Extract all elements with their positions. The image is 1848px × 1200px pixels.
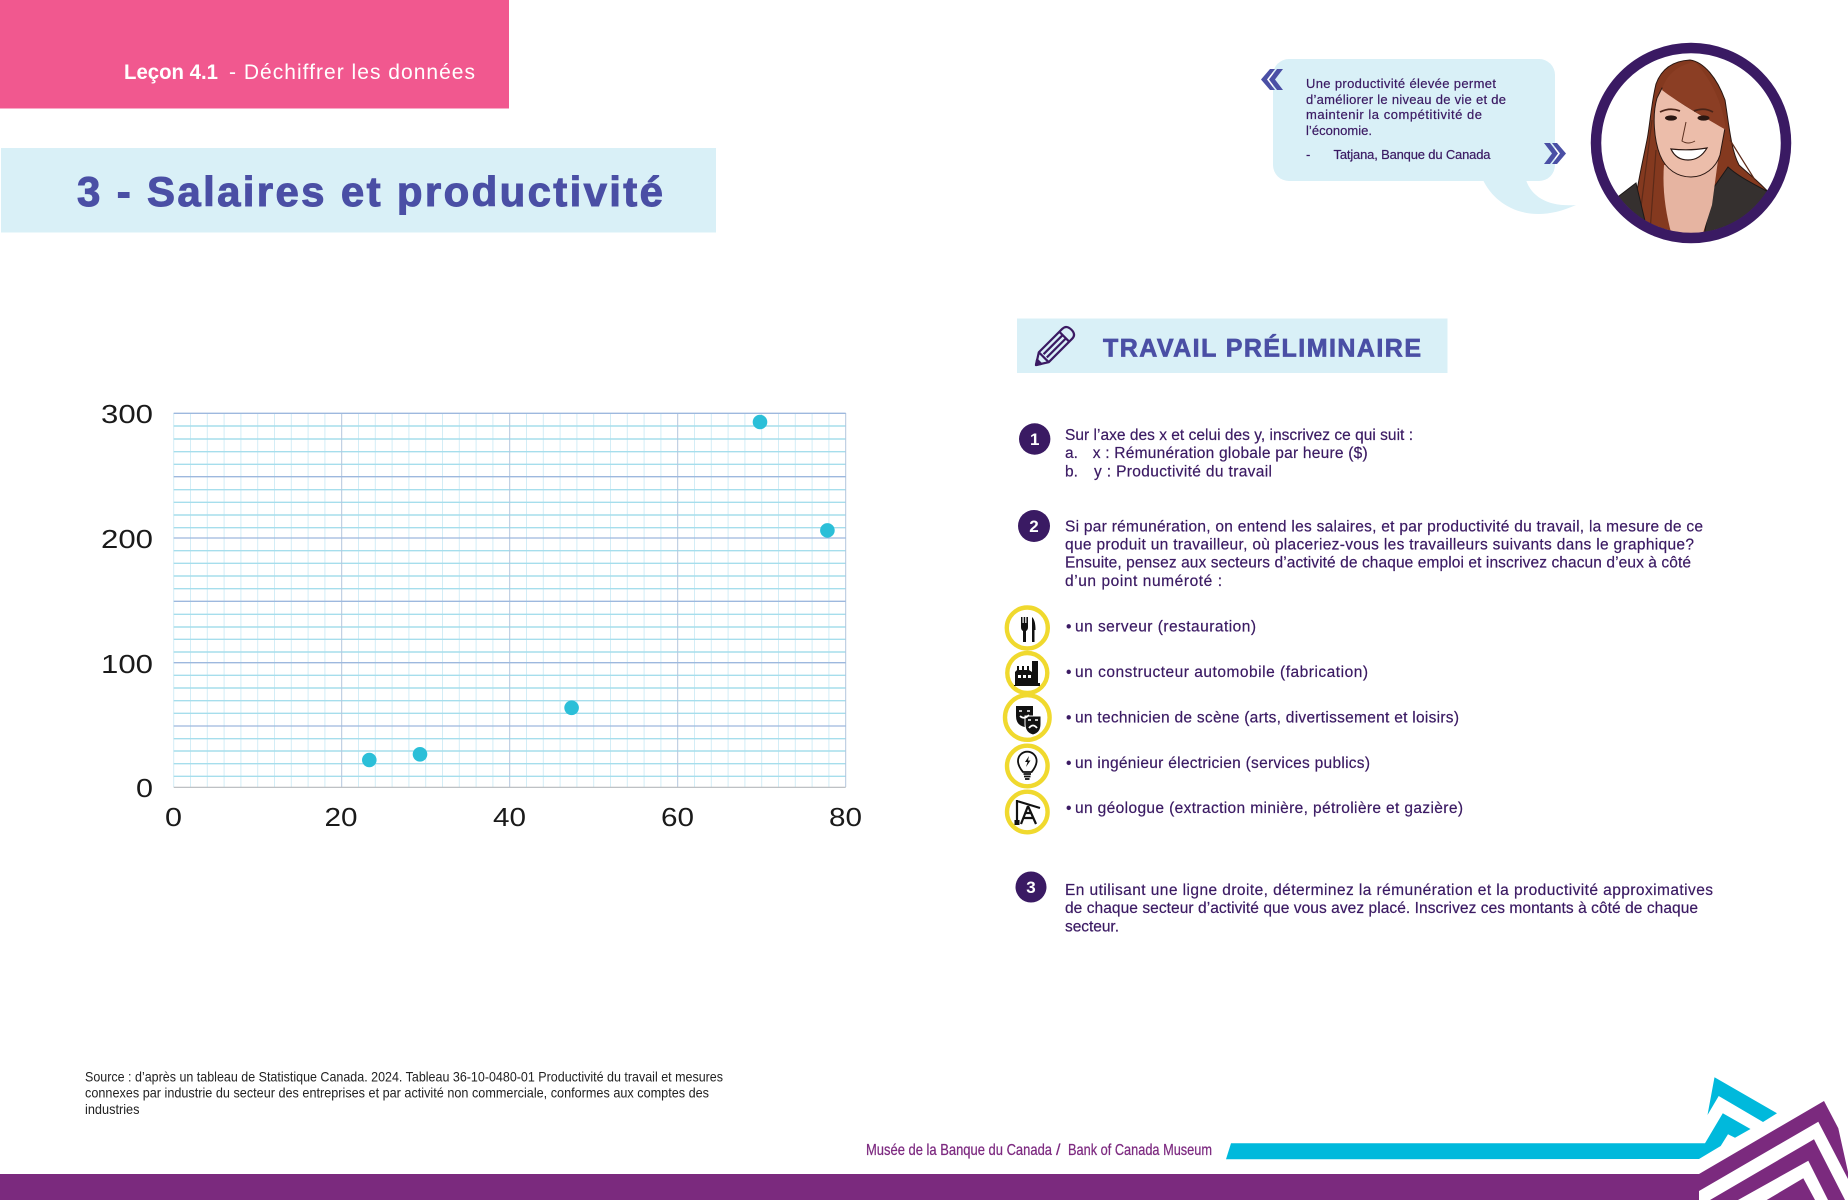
- step 2 text: [1065, 519, 1703, 590]
- step number 2: [1018, 510, 1050, 542]
- list: workers and sectors: [1005, 608, 1463, 832]
- data points: [362, 415, 835, 767]
- face: [1654, 88, 1725, 177]
- step 1 text: b.: [1065, 464, 1078, 480]
- list text: un ingénieur électricien (services publics): [1075, 755, 1370, 772]
- title panel: [1, 148, 716, 232]
- y axis labels: 0: [136, 773, 153, 803]
- step 1 text: Sur l’axe des x et celui des y, inscrivez ce qui suit :: [1065, 427, 1413, 444]
- list text: [1066, 619, 1463, 817]
- list text: un technicien de scène (arts, divertissement et loisirs): [1075, 710, 1459, 727]
- quote text: d’améliorer le niveau de vie et de: [1306, 92, 1506, 107]
- icon: closing quote mark: [1544, 143, 1566, 164]
- y axis labels: [101, 399, 153, 803]
- step 2 text: que produit un travailleur, où placeriez-vous les travailleurs suivants dans le graphique?: [1065, 536, 1694, 554]
- bubble body: [1273, 59, 1555, 181]
- logo chevron 2: [1710, 1139, 1845, 1200]
- jacket: [1618, 166, 1767, 232]
- cyan upper chevron: [1708, 1077, 1777, 1122]
- panel heading: travail préliminaire: [1017, 318, 1448, 373]
- y axis labels: 200: [101, 524, 153, 554]
- x axis labels: 0: [165, 802, 182, 832]
- eyebrows: [1660, 109, 1713, 112]
- icon: factory: [1007, 653, 1047, 693]
- step 2 text: Si par rémunération, on entend les salaires, et par productivité du travail, la mesure de ce: [1065, 519, 1703, 536]
- step 3 text: En utilisant une ligne droite, déterminez la rémunération et la productivité approximatives: [1065, 882, 1713, 899]
- lesson label: Leçon 4.1: [124, 61, 218, 84]
- list text: un serveur (restauration): [1075, 619, 1256, 636]
- step number 3: 3: [1026, 878, 1036, 897]
- portrait: Tatjana: [1596, 48, 1790, 242]
- list text: •: [1066, 800, 1071, 817]
- hair fringe: [1662, 62, 1726, 130]
- quote text: [1306, 76, 1506, 162]
- step 3 text: de chaque secteur d’activité que vous avez placé. Inscrivez ces montants à côté de chaque: [1065, 900, 1698, 917]
- list text: •: [1066, 664, 1071, 681]
- speech bubble quote: [1261, 59, 1576, 214]
- step 3 text: [1065, 882, 1713, 936]
- list text: •: [1066, 710, 1071, 727]
- step 2: [1018, 510, 1703, 590]
- x axis labels: [165, 802, 862, 832]
- graph paper grid: [174, 413, 846, 787]
- x axis labels: 80: [829, 802, 862, 832]
- step 1 text: [1065, 427, 1413, 480]
- cyan stripe arrow: [1226, 1113, 1750, 1159]
- museum name: Musée de la Banque du Canada: [866, 1142, 1052, 1159]
- step 1: [1019, 423, 1413, 480]
- footer band and logo: [0, 1077, 1848, 1200]
- list text: un constructeur automobile (fabrication): [1075, 664, 1368, 681]
- step number 1: 1: [1030, 430, 1039, 449]
- step number 1: [1019, 423, 1050, 455]
- step 2 text: d’un point numéroté :: [1065, 573, 1222, 590]
- footer purple band with chevrons: [0, 1101, 1848, 1200]
- list text: un géologue (extraction minière, pétrolière et gazière): [1075, 800, 1463, 817]
- quote text: Une productivité élevée permet: [1306, 76, 1496, 91]
- hair back: [1634, 60, 1772, 242]
- quote text: maintenir la compétitivité de: [1306, 107, 1482, 122]
- step 2 text: Ensuite, pensez aux secteurs d’activité de chaque emploi et inscrivez chacun d’eux à côté: [1065, 555, 1691, 572]
- x axis labels: 40: [493, 802, 526, 832]
- bubble tail: [1483, 180, 1576, 214]
- icon: light bulb: [1007, 746, 1048, 786]
- header banner: lesson: [0, 0, 509, 108]
- nose: [1682, 122, 1695, 143]
- icon: theatre masks: [1005, 695, 1050, 740]
- icon: fork and knife: [1007, 608, 1048, 648]
- icon: oil pump: [1007, 792, 1048, 832]
- y axis labels: 100: [101, 649, 153, 679]
- museum name: Bank of Canada Museum: [1068, 1142, 1212, 1159]
- lesson subtitle: - Déchiffrer les données: [229, 61, 475, 84]
- icon: pencil: [1031, 325, 1076, 370]
- list text: •: [1066, 755, 1071, 772]
- x axis labels: 60: [661, 802, 694, 832]
- step 3 text: secteur.: [1065, 918, 1119, 936]
- title: 3 - Salaires et productivité: [77, 168, 663, 215]
- step 1 text: a.: [1065, 445, 1078, 462]
- hair streaks: [1641, 120, 1756, 224]
- source note: industries: [85, 1101, 140, 1117]
- neck and chest: [1663, 160, 1718, 236]
- step 3: [1016, 872, 1713, 936]
- source note: connexes par industrie du secteur des entreprises et par activité non commerciale, conformes aux comptes des: [85, 1085, 709, 1101]
- quote text: -: [1306, 147, 1310, 162]
- source note: Source : d’après un tableau de Statistique Canada. 2024. Tableau 36-10-0480-01 Productivité du travail et mesures: [85, 1069, 723, 1085]
- quote text: l’économie.: [1306, 123, 1372, 138]
- step number 3: [1016, 872, 1046, 902]
- chart: wages and productivity scatter: [101, 399, 862, 832]
- mouth: [1671, 148, 1707, 160]
- step number 2: 2: [1029, 517, 1039, 536]
- logo chevron 3: [1767, 1178, 1815, 1200]
- museum name: [866, 1142, 1212, 1159]
- y axis labels: 300: [101, 399, 153, 429]
- portrait ring: [1596, 48, 1786, 238]
- heading text: TRAVAIL PRÉLIMINAIRE: [1103, 334, 1421, 362]
- icon: opening quote mark: [1261, 69, 1283, 90]
- museum name: /: [1056, 1142, 1061, 1159]
- step 1 text: y : Productivité du travail: [1094, 464, 1272, 480]
- eyes: [1665, 115, 1677, 121]
- quote text: Tatjana, Banque du Canada: [1334, 147, 1491, 162]
- step 1 text: x : Rémunération globale par heure ($): [1093, 445, 1368, 462]
- source note: [85, 1069, 723, 1117]
- list text: •: [1066, 619, 1071, 636]
- x axis labels: 20: [324, 802, 358, 832]
